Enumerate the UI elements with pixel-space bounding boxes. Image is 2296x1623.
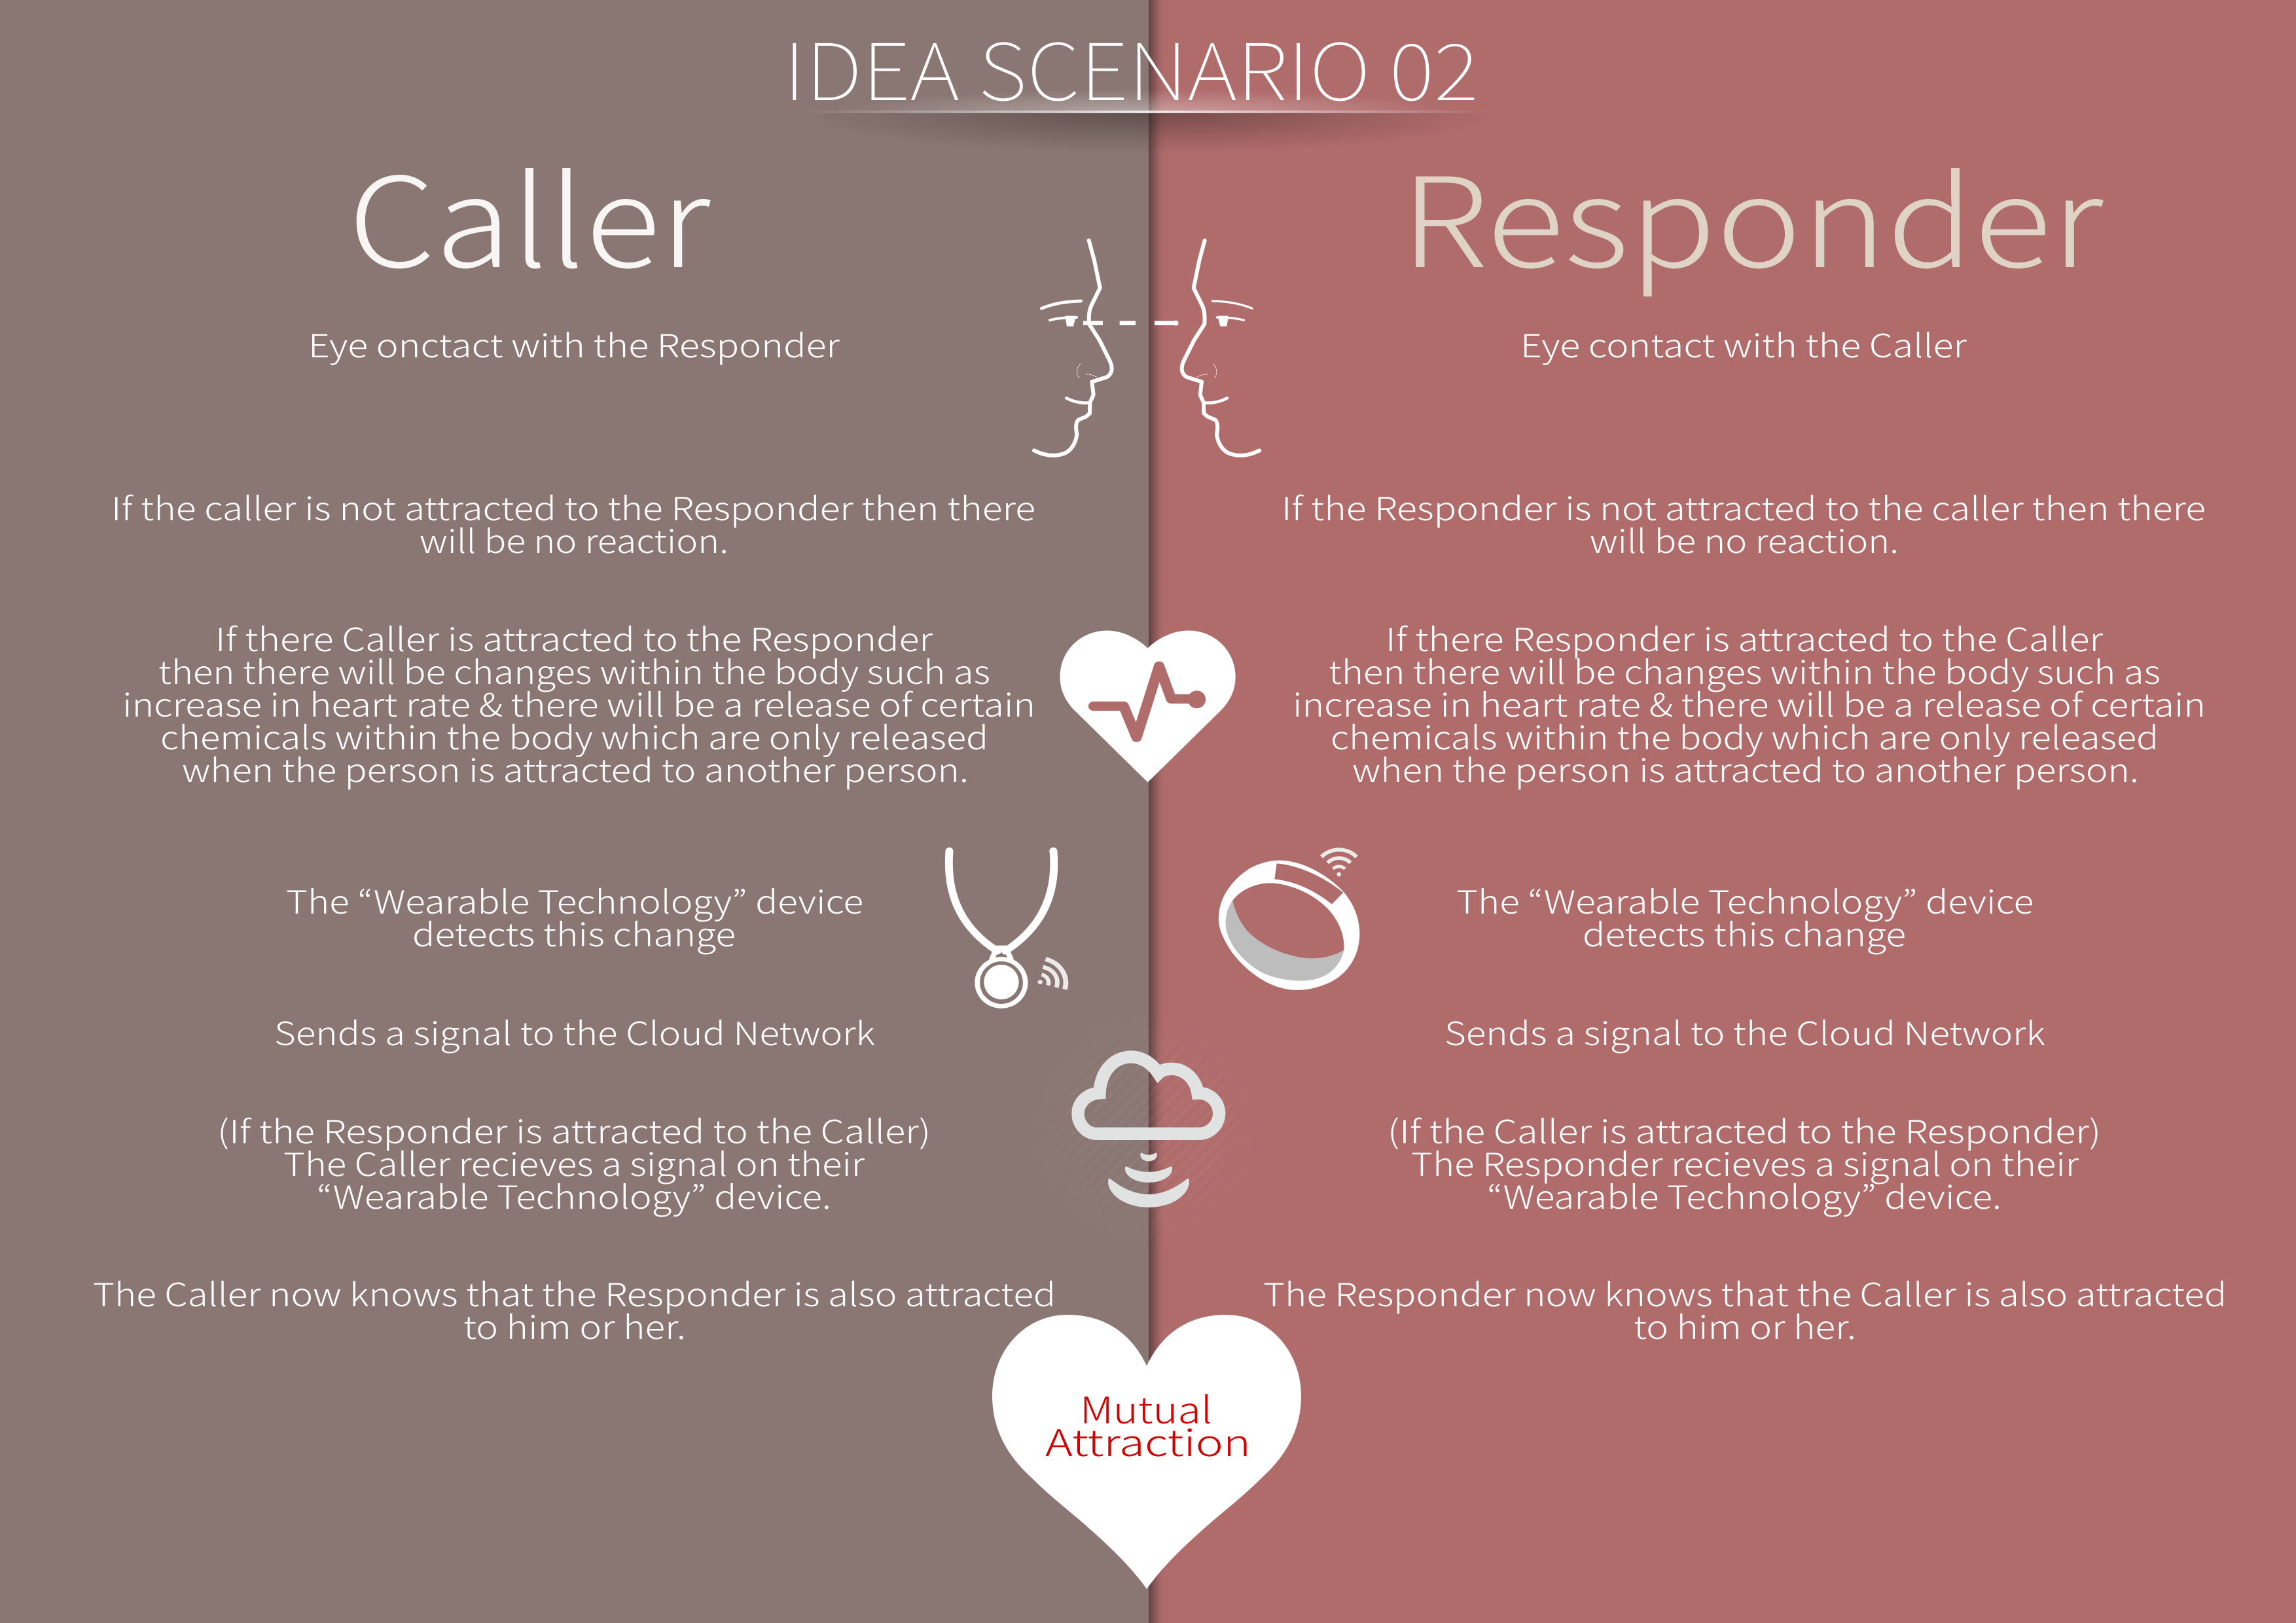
eye line dashes [1083,321,1179,326]
heading: Caller: Caller [348,123,711,303]
text: receives signal: The Caller recieves a signal on their [283,1139,865,1186]
title [793,42,1474,147]
icon: mutual attraction heart [992,1315,1301,1589]
text: no attraction [111,484,1035,563]
text: no attraction [1282,484,2206,563]
text: receives signal [217,1107,931,1219]
text: no attraction: If the Responder is not attracted to the caller then there [1282,484,2206,530]
text: caller knows [93,1270,1056,1349]
icon: ring wearable [1219,849,1359,990]
caller face [1034,240,1112,455]
text: attraction changes: chemicals within the body which are only released [160,713,988,759]
label: mutual attraction: Attraction [1045,1414,1251,1467]
cloud texture [1024,1005,1273,1253]
text: device detects: detects this change [1583,910,1906,956]
panel: responder [1149,0,2296,1623]
heading: Responder: Responder [1401,123,2104,303]
text: receives signal: “Wearable Technology” device. [317,1172,831,1219]
text: eye contact: Eye onctact with the Responder [308,321,840,367]
text: attraction changes: chemicals within the body which are only released [1331,713,2159,759]
text: receives signal: (If the Responder is attracted to the Caller) [217,1107,931,1153]
text: caller knows: to him or her. [463,1302,686,1349]
text: caller knows: The Caller now knows that the Responder is also attracted [93,1270,1056,1316]
text: responder knows: to him or her. [1634,1302,1856,1349]
text: attraction changes: when the person is attracted to another person. [182,745,969,792]
title: IDEA SCENARIO 02 [783,9,1479,123]
label: mutual attraction [1045,1382,1251,1467]
text: no attraction: If the caller is not attracted to the Responder then there [111,484,1035,530]
text: attraction changes: increase in heart rate & there will be a release of certain [1293,680,2206,726]
text: receives signal: (If the Caller is attracted to the Responder) [1388,1107,2101,1153]
signal arcs [1038,959,1066,990]
wifi arcs [1321,849,1357,876]
text: attraction changes: then there will be changes within the body such as [1329,647,2161,694]
panel: caller [0,0,1149,1623]
text: attraction changes: increase in heart rate & there will be a release of certain [122,680,1035,726]
responder face [1182,240,1259,455]
text: attraction changes [1293,615,2206,792]
text: device detects: detects this change [412,910,736,956]
text: device detects: The “Wearable Technology” device [1456,877,2034,923]
text: sends signal: Sends a signal to the Cloud Network [274,1008,875,1055]
text: responder knows: The Responder now knows that the Caller is also attracted [1263,1270,2227,1316]
text: attraction changes: If there Caller is attracted to the Responder [215,615,933,661]
text: no attraction: will be no reaction. [1590,516,1899,563]
text: device detects [1456,877,2034,956]
text: device detects [286,877,863,956]
text: attraction changes: then there will be changes within the body such as [158,647,990,694]
text: receives signal [1388,1107,2101,1219]
text: eye contact: Eye contact with the Caller [1520,321,1967,367]
text: attraction changes [122,615,1035,792]
icon: cloud with signal waves [1078,1057,1219,1206]
label: mutual attraction: Mutual [1080,1382,1212,1435]
icon: heart with pulse line [1060,630,1236,782]
text: receives signal: The Responder recieves a signal on their [1411,1139,2079,1186]
text: attraction changes: If there Responder is attracted to the Caller [1386,615,2103,661]
icon: faces in eye contact [1034,240,1259,455]
text: responder knows [1263,1270,2227,1349]
text: no attraction: will be no reaction. [420,516,728,563]
icon: necklace wearable [949,851,1066,1006]
text: attraction changes: when the person is attracted to another person. [1352,745,2139,792]
text: sends signal: Sends a signal to the Cloud Network [1444,1008,2045,1055]
text: receives signal: “Wearable Technology” device. [1487,1172,2001,1219]
text: device detects: The “Wearable Technology” device [286,877,863,923]
